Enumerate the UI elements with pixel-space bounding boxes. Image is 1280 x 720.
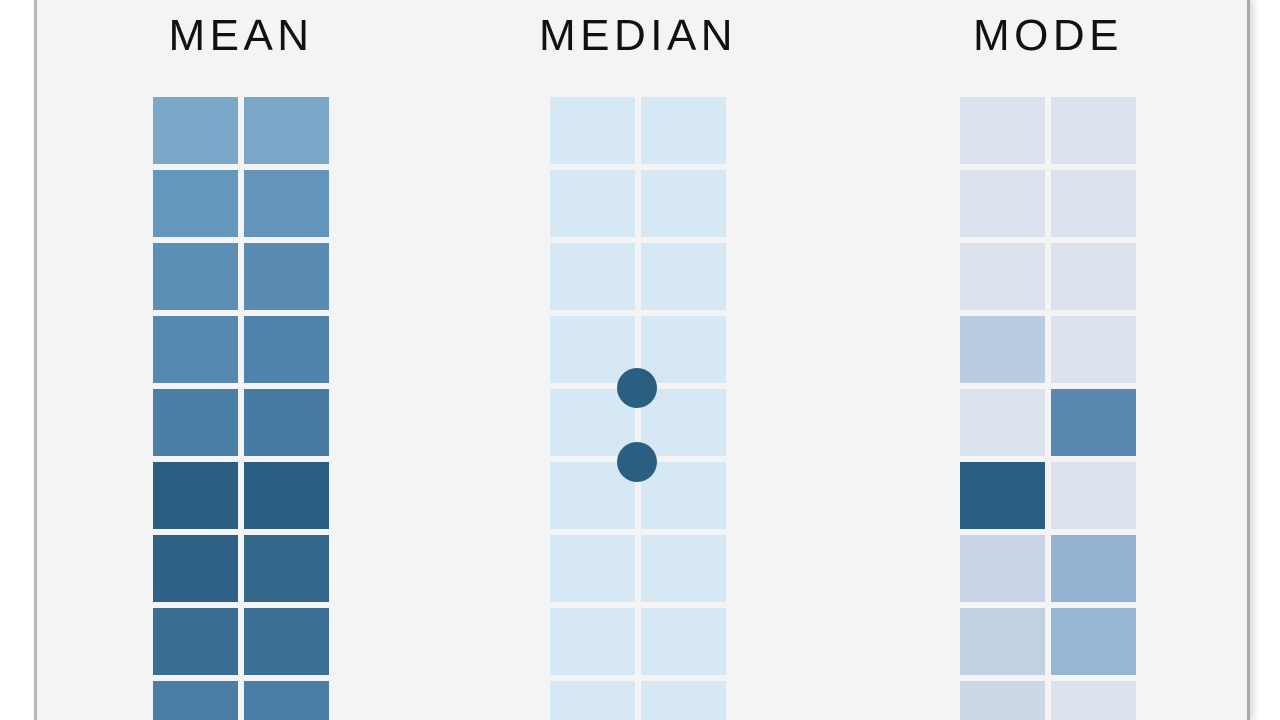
title: median: MEDIAN xyxy=(539,11,737,60)
grid: median xyxy=(550,97,726,720)
median dot upper xyxy=(617,368,657,408)
grid: mode xyxy=(960,97,1136,720)
title: mean: MEAN xyxy=(168,11,314,60)
grid: mean xyxy=(153,97,329,720)
median dot lower xyxy=(617,442,657,482)
title: mode: MODE xyxy=(973,11,1123,60)
